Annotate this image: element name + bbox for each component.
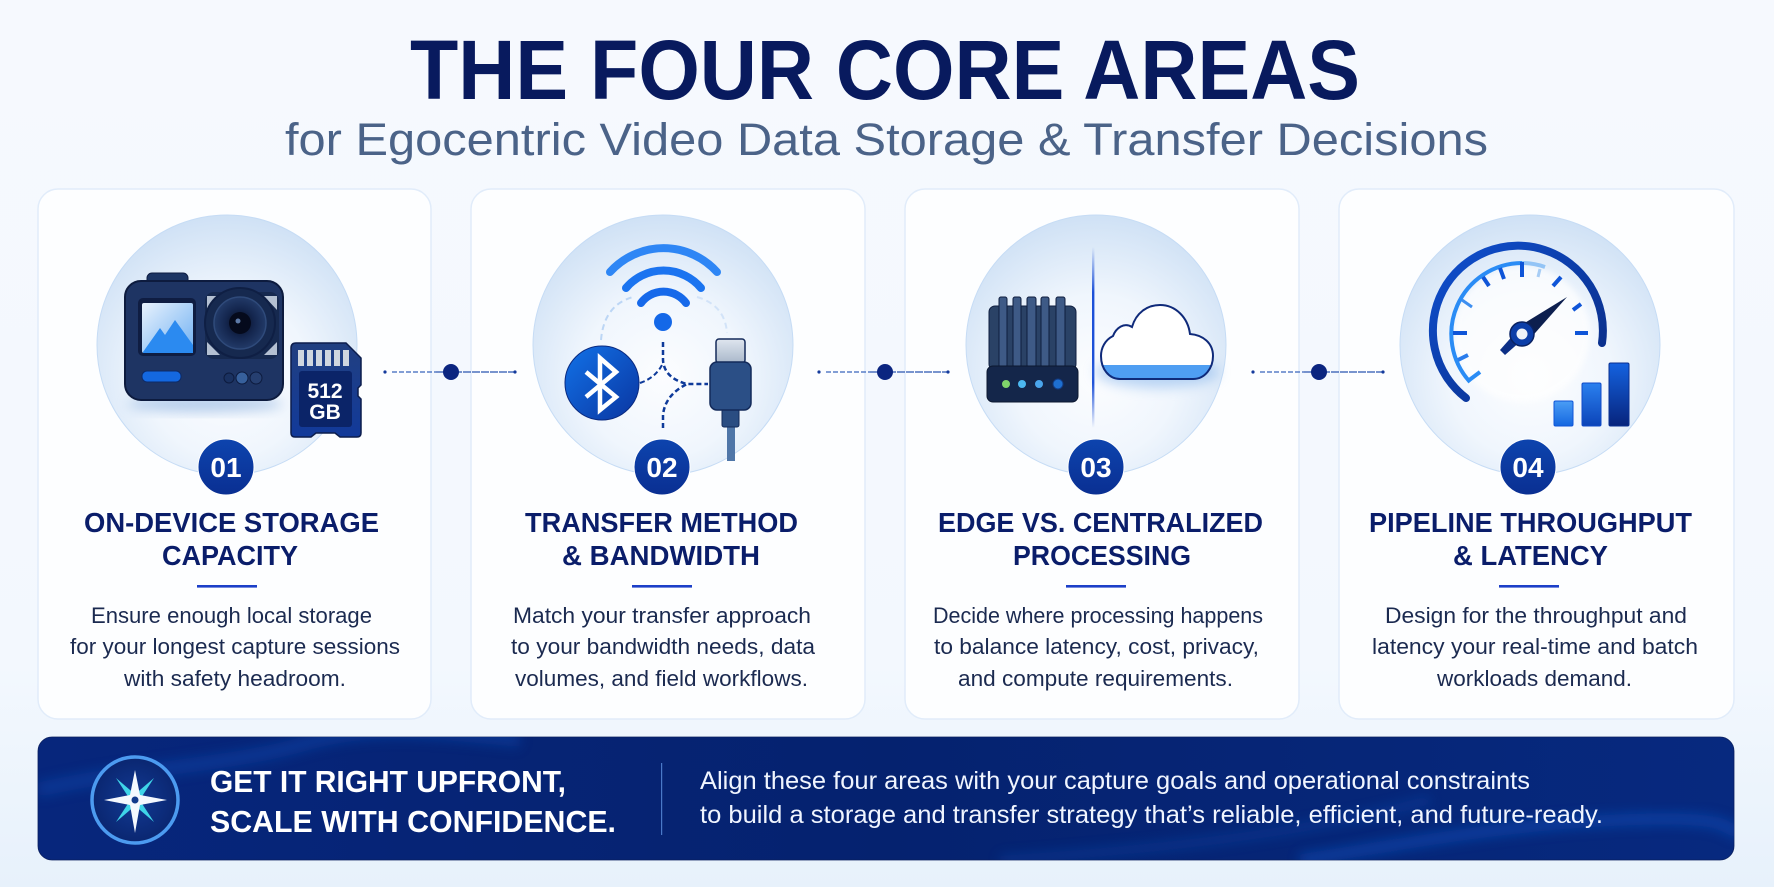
icon: bluetooth — [565, 346, 639, 420]
panel: edge vs centralized processing — [905, 189, 1299, 719]
card description — [511, 603, 816, 691]
icon: speed gauge — [1433, 246, 1603, 402]
connector 3 to 4 — [1251, 364, 1385, 380]
icon: edge device — [987, 297, 1078, 402]
icon: 512 GB memory card — [291, 343, 361, 437]
gauge needle — [1500, 297, 1567, 355]
icon disc 2 — [533, 215, 793, 475]
icon: 512 GB memory card: GB — [309, 401, 341, 424]
banner heading: SCALE WITH CONFIDENCE. — [210, 804, 616, 839]
banner: takeaway — [38, 731, 1740, 860]
card description: workloads demand. — [1436, 666, 1632, 691]
connector 1 to 2 — [383, 364, 517, 380]
panel: on-device storage capacity — [38, 189, 431, 719]
number badge 02: 02 — [646, 452, 678, 483]
icon: compass star — [92, 757, 178, 843]
card heading: & LATENCY — [1453, 540, 1608, 571]
card heading: TRANSFER METHOD — [525, 507, 798, 538]
icon: action camera — [125, 273, 283, 412]
card description: Match your transfer approach — [513, 603, 811, 628]
card heading — [938, 507, 1263, 571]
number badge 01 — [198, 439, 254, 495]
card description: with safety headroom. — [123, 666, 346, 691]
card heading — [1369, 507, 1692, 571]
subtitle: for Egocentric Video Data Storage & Transfer Decisions — [285, 114, 1488, 165]
card description: and compute requirements. — [958, 666, 1233, 691]
card description: for your longest capture sessions — [70, 634, 400, 659]
card description: to balance latency, cost, privacy, — [934, 634, 1259, 659]
card description: Decide where processing happens — [933, 603, 1263, 628]
icon: throughput bars — [1554, 363, 1629, 426]
banner heading — [210, 764, 616, 839]
icon disc 1 — [97, 215, 357, 475]
icon: 512 GB memory card: 512 — [307, 380, 343, 403]
banner heading: GET IT RIGHT UPFRONT, — [210, 764, 566, 799]
number badge 02 — [634, 439, 690, 495]
card heading: CAPACITY — [162, 540, 298, 571]
card heading: EDGE VS. CENTRALIZED — [938, 507, 1263, 538]
icon: wifi signal — [610, 248, 717, 331]
banner description: Align these four areas with your capture goals and operational constraints — [700, 767, 1530, 795]
card description — [933, 603, 1263, 691]
icon: cloud — [1095, 305, 1219, 388]
card description: latency your real-time and batch — [1372, 634, 1698, 659]
card description: to your bandwidth needs, data — [511, 634, 816, 659]
connection lines — [601, 297, 727, 428]
card description: Design for the throughput and — [1385, 603, 1687, 628]
card description: Ensure enough local storage — [91, 603, 372, 628]
panel: pipeline throughput and latency — [1339, 189, 1734, 719]
icon disc 4 — [1400, 215, 1660, 475]
banner description: to build a storage and transfer strategy that’s reliable, efficient, and future-ready. — [700, 801, 1603, 829]
number badge 04: 04 — [1512, 452, 1544, 483]
card heading: & BANDWIDTH — [562, 540, 760, 571]
number badge 01: 01 — [210, 452, 242, 483]
card heading: PROCESSING — [1013, 540, 1191, 571]
card description: volumes, and field workflows. — [515, 666, 808, 691]
card heading: PIPELINE THROUGHPUT — [1369, 507, 1692, 538]
connector 2 to 3 — [817, 364, 950, 380]
panel: transfer method and bandwidth — [471, 189, 865, 719]
card heading: ON-DEVICE STORAGE — [84, 507, 379, 538]
number badge 04 — [1500, 439, 1556, 495]
number badge 03 — [1068, 439, 1124, 495]
card description — [70, 603, 400, 691]
title: THE FOUR CORE AREAS — [410, 23, 1360, 117]
card heading — [525, 507, 798, 571]
banner description — [700, 767, 1603, 829]
icon: usb-c cable — [710, 339, 751, 461]
number badge 03: 03 — [1080, 452, 1112, 483]
card heading — [84, 507, 379, 571]
icon disc 3 — [966, 215, 1226, 475]
card description — [1372, 603, 1698, 691]
